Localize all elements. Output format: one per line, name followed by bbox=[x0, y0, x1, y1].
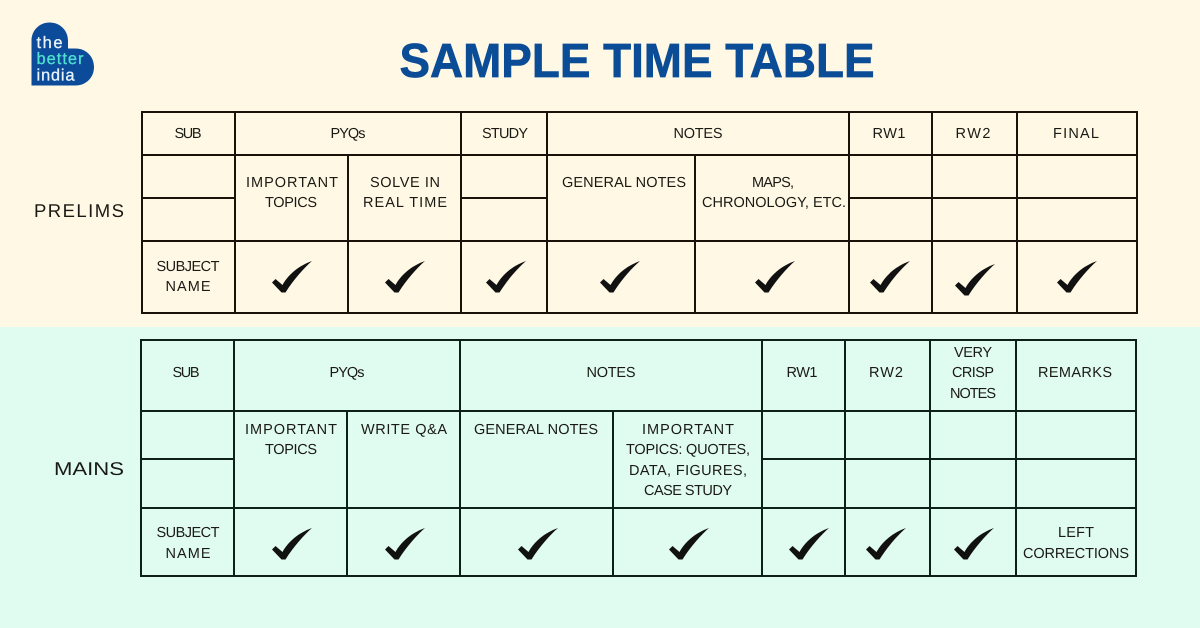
mains sub-headers: IMPORTANT bbox=[642, 422, 734, 438]
mains check marks bbox=[272, 528, 994, 560]
prelims header row: NOTES bbox=[674, 126, 722, 142]
prelims header row: PYQs bbox=[330, 126, 366, 142]
mains header row: SUB bbox=[172, 365, 200, 381]
label: mains: MAINS bbox=[54, 458, 124, 479]
prelims subject name bbox=[156, 259, 220, 295]
mains left corrections note bbox=[1023, 525, 1129, 562]
prelims sub-headers bbox=[246, 175, 846, 211]
prelims header row bbox=[174, 126, 1099, 142]
mains subject name bbox=[156, 525, 220, 562]
prelims subject name: SUBJECT bbox=[156, 259, 220, 275]
prelims table grid bbox=[142, 112, 1137, 313]
mains left corrections note: LEFT bbox=[1058, 525, 1094, 541]
mains table grid bbox=[141, 340, 1136, 576]
mains header row: VERY bbox=[954, 345, 992, 361]
prelims subject name: NAME bbox=[166, 279, 211, 295]
prelims sub-headers: GENERAL NOTES bbox=[562, 175, 686, 191]
mains sub-headers: IMPORTANT bbox=[245, 422, 337, 438]
title: SAMPLE TIME TABLE bbox=[400, 35, 874, 88]
prelims header row: RW2 bbox=[956, 126, 990, 142]
prelims header row: SUB bbox=[174, 126, 202, 142]
prelims sub-headers: MAPS, bbox=[752, 175, 794, 191]
prelims header row: FINAL bbox=[1053, 126, 1099, 142]
prelims sub-headers: IMPORTANT bbox=[246, 175, 338, 191]
logo: the better india: india bbox=[36, 66, 75, 84]
prelims header row: RW1 bbox=[872, 126, 906, 142]
mains sub-headers: GENERAL NOTES bbox=[474, 422, 598, 438]
mains header row: REMARKS bbox=[1038, 365, 1112, 381]
mains sub-headers: TOPICS bbox=[265, 442, 317, 458]
panel: mains background bbox=[0, 327, 1200, 628]
mains header row: RW1 bbox=[786, 365, 818, 381]
mains left corrections note: CORRECTIONS bbox=[1023, 546, 1129, 562]
mains header row: RW2 bbox=[869, 365, 903, 381]
mains subject name: SUBJECT bbox=[156, 525, 220, 541]
table: prelims bbox=[142, 112, 1137, 313]
logo: the better india: better bbox=[36, 50, 84, 68]
prelims sub-headers: TOPICS bbox=[265, 195, 317, 211]
prelims sub-headers: REAL TIME bbox=[363, 195, 447, 211]
label: prelims: PRELIMS bbox=[34, 200, 124, 221]
mains header row bbox=[172, 345, 1112, 402]
mains sub-headers bbox=[245, 422, 750, 499]
mains header row: NOTES bbox=[950, 386, 996, 402]
prelims sub-headers: SOLVE IN bbox=[370, 175, 440, 191]
table: mains bbox=[141, 340, 1136, 576]
mains header row: PYQs bbox=[330, 365, 364, 381]
logo: the better india: the bbox=[36, 34, 62, 52]
prelims check marks bbox=[272, 261, 1097, 296]
prelims sub-headers: CHRONOLOGY, ETC. bbox=[702, 195, 846, 211]
mains sub-headers: WRITE Q&A bbox=[361, 422, 447, 438]
mains header row: NOTES bbox=[586, 365, 636, 381]
logo: the better india bbox=[32, 22, 94, 86]
mains header row: CRISP bbox=[952, 365, 994, 381]
prelims header row: STUDY bbox=[482, 126, 528, 142]
mains sub-headers: TOPICS: QUOTES, bbox=[626, 442, 750, 458]
mains subject name: NAME bbox=[166, 546, 211, 562]
mains sub-headers: DATA, FIGURES, bbox=[629, 463, 747, 479]
mains sub-headers: CASE STUDY bbox=[644, 483, 732, 499]
